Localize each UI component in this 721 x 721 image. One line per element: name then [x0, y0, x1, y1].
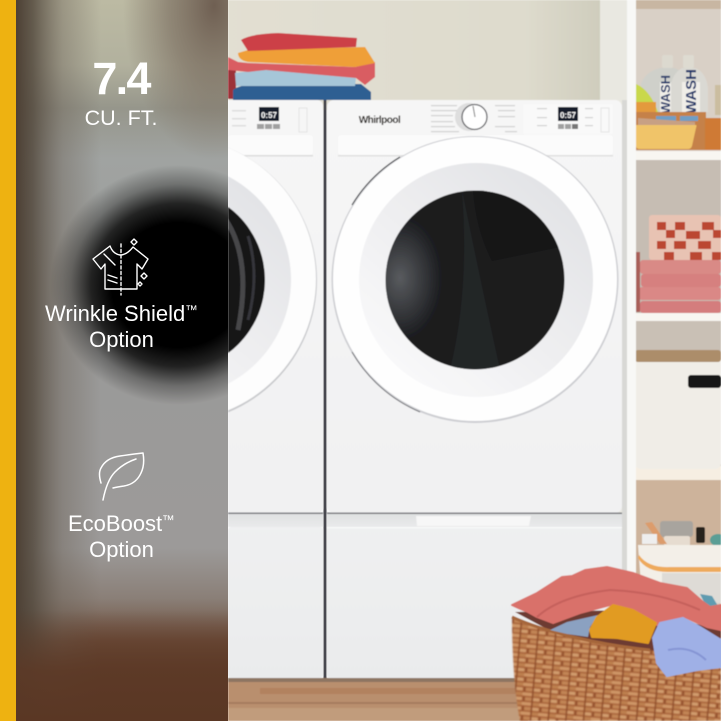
dryer pedestal	[327, 512, 622, 678]
capacity number: 7.4	[92, 53, 151, 104]
feature label: EcoBoost	[68, 511, 175, 536]
icon: shirt with sparkles	[93, 239, 148, 295]
washer control panel: 0:57	[261, 111, 278, 120]
stacked towels	[636, 215, 721, 313]
blurred background tones	[16, 0, 228, 721]
frosted panel	[16, 0, 228, 721]
washer, partially hidden	[228, 100, 324, 513]
coral cloth	[512, 567, 721, 630]
cleaning bottles	[636, 55, 721, 150]
gaps between appliances	[324, 100, 326, 678]
dryer door	[332, 136, 618, 423]
back wall	[228, 0, 600, 110]
cycle labels	[431, 105, 593, 132]
dryer display: 0:57	[560, 111, 577, 120]
floor	[228, 678, 528, 721]
teal cloth	[700, 594, 718, 606]
dryer display	[558, 107, 609, 132]
feature: wrinkle shield: Option	[89, 327, 154, 352]
blue cloth	[550, 615, 598, 637]
laundry basket	[512, 567, 721, 721]
whirlpool logo: Whirlpool	[359, 115, 401, 126]
dryer body	[327, 100, 622, 513]
dial	[455, 103, 487, 131]
shadow inside basket	[515, 610, 721, 660]
mustard knit	[590, 605, 656, 643]
stacked folded clothes	[228, 33, 375, 100]
icon: leaf	[100, 453, 144, 500]
side wall and cabinet face	[600, 0, 628, 721]
shelving unit	[627, 0, 721, 721]
feature: ecoboost	[68, 453, 175, 562]
metric: 7.4 cu. ft.	[86, 62, 156, 125]
washer door	[228, 154, 318, 412]
cleaning bottles: WASH	[683, 69, 700, 114]
cleaning bottles: WASH	[658, 75, 673, 114]
feature: ecoboost: Option	[89, 537, 154, 562]
feature label: ™	[185, 303, 198, 317]
supply caddy	[638, 521, 721, 603]
feature label: Wrinkle Shield	[45, 301, 198, 326]
washer pedestal	[228, 512, 323, 678]
lavender cloth	[653, 618, 721, 676]
storage bin	[635, 350, 721, 469]
dryer top control area	[338, 135, 613, 155]
washer control panel	[228, 107, 313, 156]
scene photo: laundry room	[228, 0, 721, 721]
feature label: ™	[162, 513, 175, 527]
feature: wrinkle shield	[45, 239, 198, 352]
yellow side bar	[0, 0, 16, 721]
capacity unit: CU. FT.	[85, 106, 157, 130]
